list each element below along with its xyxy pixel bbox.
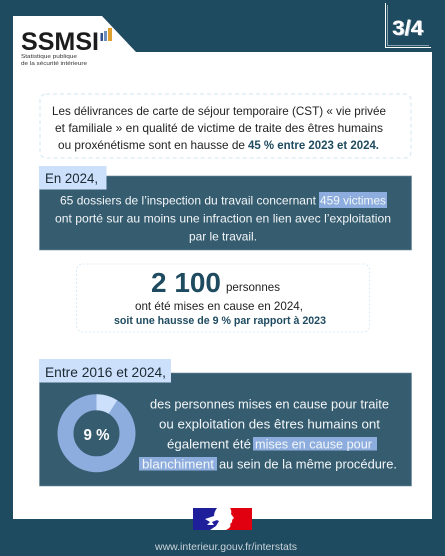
callout: residence permits <box>40 94 411 158</box>
callout: residence permits: et familiale » en qualité de victime de traite des êtres humains <box>55 121 383 135</box>
panel: 2016-2024 laundering: au sein de la même procédure. <box>219 456 397 472</box>
card: 2 100 persons: 2 100 <box>151 267 221 298</box>
panel: 2016-2024 laundering: Entre 2016 et 2024, <box>45 365 166 380</box>
panel: 2016-2024 laundering: blanchiment <box>142 456 214 472</box>
callout: residence permits: Les délivrances de carte de séjour temporaire (CST) « vie privée <box>52 104 386 118</box>
panel: 2024 labour inspection: En 2024, <box>45 171 98 186</box>
callout: residence permits: ou proxénétisme sont en hausse de <box>58 138 245 152</box>
panel: 2016-2024 laundering: mises en cause pour <box>255 436 373 452</box>
card: 2 100 persons: personnes <box>226 282 280 294</box>
panel: 2024 labour inspection: ont porté sur au moins une infraction en lien avec l’exploitation <box>55 212 391 226</box>
logo: SSMSI <box>21 28 112 67</box>
page number 3/4: 3/4 <box>393 18 424 40</box>
logo: SSMSI: de la sécurité intérieure <box>21 61 87 67</box>
panel: 2016-2024 laundering: ou exploitation des êtres humains ont <box>159 416 380 432</box>
card: 2 100 persons <box>76 264 370 332</box>
donut chart: 9 % <box>66 394 128 464</box>
logo: SSMSI: Statistique publique <box>21 54 77 60</box>
donut chart: 9 %: 9 % <box>84 427 110 444</box>
panel: 2016-2024 laundering <box>39 359 412 486</box>
page number 3/4: 3/4 <box>392 17 423 40</box>
page number 3/4 <box>386 3 431 48</box>
panel: 2024 labour inspection: par le travail. <box>189 230 257 244</box>
panel: 2016-2024 laundering: des personnes mises en cause pour traite <box>150 396 389 412</box>
panel: 2024 labour inspection: 459 victimes <box>320 194 386 208</box>
card: 2 100 persons: soit une hausse de 9 % par rapport à 2023 <box>114 315 326 327</box>
footer url: www.interieur.gouv.fr/interstats <box>154 541 297 553</box>
card: 2 100 persons: ont été mises en cause en 2024, <box>135 299 303 313</box>
callout: residence permits: 45 % entre 2023 et 2024. <box>248 138 379 152</box>
panel: 2016-2024 laundering: également été <box>167 436 251 452</box>
logo: French Republic flag <box>193 508 252 530</box>
panel: 2024 labour inspection: 65 dossiers de l’inspection du travail concernant <box>60 194 317 208</box>
panel: 2024 labour inspection <box>39 166 412 250</box>
logo: SSMSI: SSMSI <box>21 28 99 56</box>
